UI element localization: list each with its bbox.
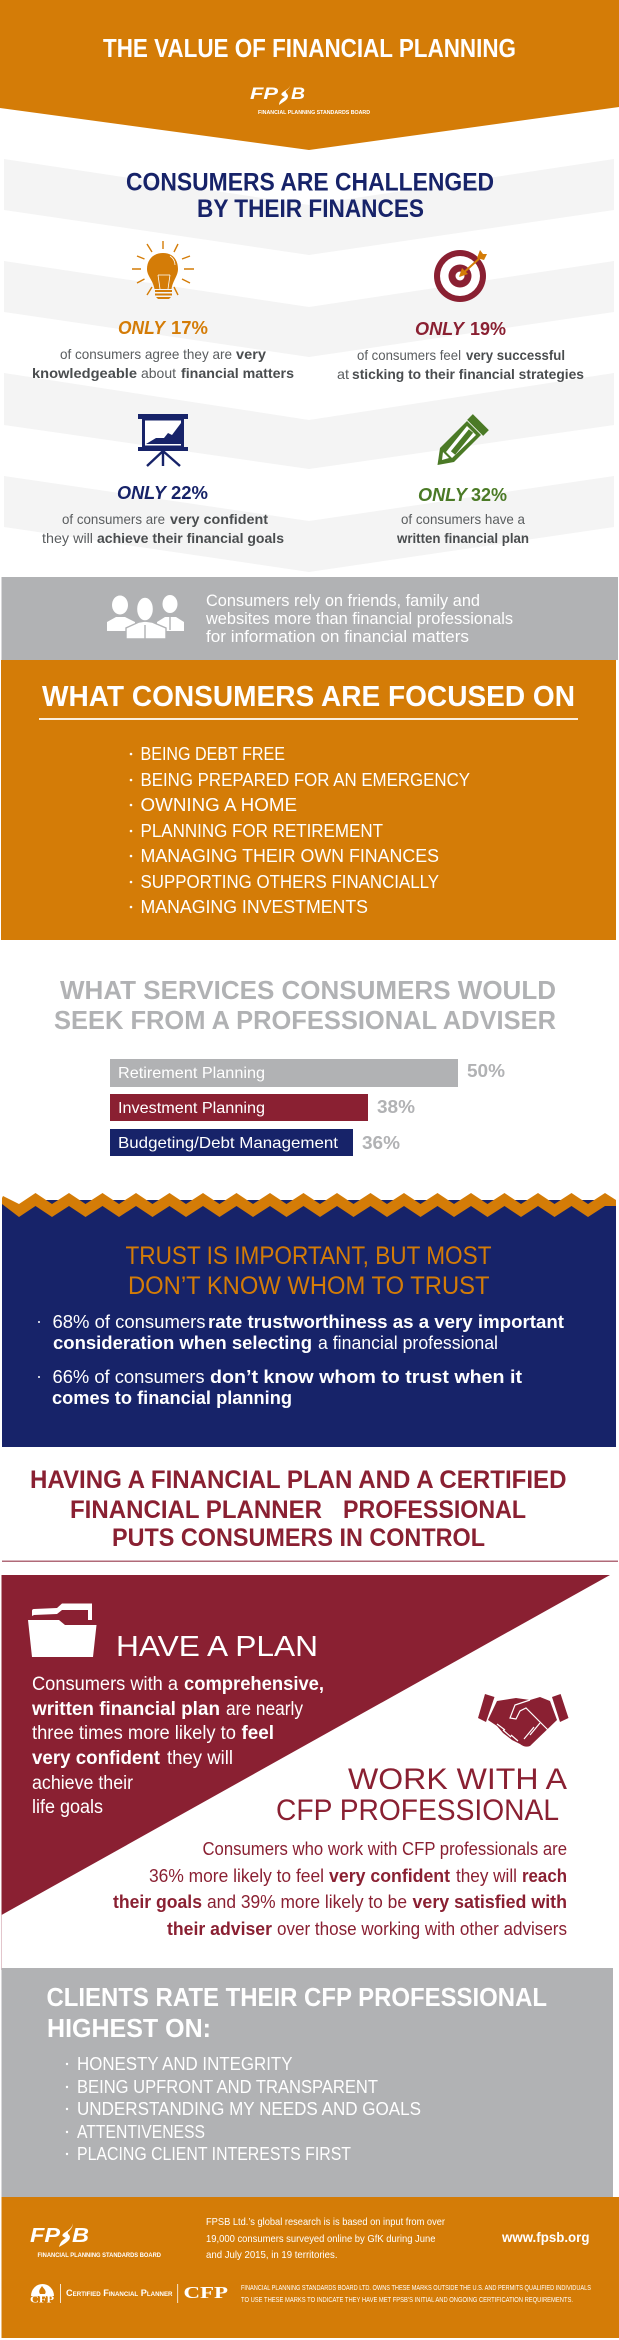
icon: FPSB footer logo	[30, 2222, 161, 2259]
text: 68% bullet: 68% of consumers	[52, 1312, 205, 1332]
stat: only 22%	[42, 483, 284, 546]
list: consumer focus items: BEING DEBT FREE	[140, 744, 285, 764]
stat: only 22%: of consumers are	[62, 511, 165, 527]
panel: footer	[2, 2197, 619, 2338]
stat: only 17%: very	[236, 346, 266, 362]
stat: only 32%	[396, 485, 529, 546]
stat: only 17%	[32, 318, 294, 381]
text: work with a CFP professional body: over those working with other advisers	[277, 1919, 567, 1939]
text: 68% bullet: consideration when selecting	[53, 1333, 312, 1353]
stat: only 17%: 17%	[171, 318, 208, 338]
heading: financial plan and CFP professional: HAVING A FINANCIAL PLAN AND A CERTIFIED	[30, 1466, 566, 1494]
heading: financial plan and CFP professional: FINANCIAL PLANNER	[70, 1496, 322, 1524]
text: work with a CFP professional body: they will	[456, 1866, 517, 1886]
icon: presentation board	[138, 414, 188, 466]
stat: only 17%: ONLY	[118, 318, 167, 338]
list: consumer focus items: SUPPORTING OTHERS FINANCIALLY	[140, 872, 439, 892]
title: THE VALUE OF FINANCIAL PLANNING	[103, 33, 516, 63]
text: 66% bullet: don’t know whom to trust when it	[210, 1367, 522, 1387]
text: have a plan body: life goals	[32, 1797, 103, 1818]
text: work with a CFP professional body: their adviser	[167, 1919, 272, 1939]
stat: only 22%: ONLY	[117, 483, 168, 503]
icon: handshake	[478, 1694, 568, 1747]
icon: FPSB logo: FINANCIAL PLANNING STANDARDS BOARD	[258, 110, 370, 116]
heading: clients rate	[46, 1982, 547, 2043]
stat: only 19%	[337, 319, 584, 382]
bar: investment planning 38%: 38%	[377, 1097, 415, 1117]
callout text	[205, 591, 513, 646]
list: client ratings: HONESTY AND INTEGRITY	[77, 2054, 292, 2074]
text: work with a CFP professional body: reach	[522, 1866, 567, 1886]
text: work with a CFP professional body: Consumers who work with CFP professionals are	[202, 1839, 567, 1859]
text: have a plan body: written financial plan	[31, 1699, 220, 1720]
stat: only 19%: of consumers feel	[357, 347, 461, 363]
list: consumer focus items: BEING PREPARED FOR AN EMERGENCY	[140, 770, 470, 790]
heading: trust: DON’T KNOW WHOM TO TRUST	[128, 1272, 490, 1300]
text: research note: 19,000 consumers surveyed online by GfK during June	[206, 2233, 436, 2245]
panel: what consumers are focused on	[1, 660, 616, 940]
text: website: www.fpsb.org	[501, 2229, 590, 2245]
heading: consumers are challenged: BY THEIR FINANCES	[197, 195, 424, 223]
icon: pencil	[438, 417, 486, 465]
stat: only 22%: achieve their financial goals	[97, 530, 284, 546]
stat: only 32%: written financial plan	[396, 530, 529, 546]
list: client ratings	[66, 2054, 421, 2164]
text: 68% bullet	[38, 1312, 564, 1353]
text: have a plan body: comprehensive,	[184, 1674, 324, 1695]
stat: only 19%: at	[337, 366, 349, 382]
text: work with a CFP professional body: their goals	[113, 1892, 202, 1912]
bar: budgeting 36%: 36%	[362, 1133, 400, 1153]
panel: work with a CFP professional	[113, 1694, 568, 1939]
heading: have a plan: HAVE A PLAN	[116, 1631, 318, 1663]
heading: trust: TRUST IS IMPORTANT, BUT MOST	[126, 1242, 492, 1270]
text: 66% bullet	[38, 1367, 522, 1408]
heading: services from an adviser: SEEK FROM A PROFESSIONAL ADVISER	[54, 1005, 556, 1035]
list: client ratings: ATTENTIVENESS	[77, 2122, 205, 2142]
heading: financial plan and CFP professional: PROFESSIONAL	[343, 1496, 526, 1524]
header banner	[0, 0, 619, 150]
panel: friends and family callout	[2, 577, 618, 660]
text: have a plan body: achieve their	[32, 1773, 134, 1794]
bar: budgeting 36%	[110, 1129, 400, 1156]
icon: CFP marks: CFP	[184, 2283, 228, 2302]
text: research note	[206, 2216, 445, 2261]
icon: CFP marks: CFP	[30, 2294, 55, 2304]
stat: only 32%: 32%	[471, 485, 507, 505]
heading: work with a CFP professional: CFP PROFESSIONAL	[276, 1794, 559, 1827]
list: client ratings: PLACING CLIENT INTERESTS FIRST	[77, 2144, 351, 2164]
list: consumer focus items	[130, 744, 470, 917]
stat: only 32%: ONLY	[418, 485, 469, 505]
icon: FPSB footer logo: FINANCIAL PLANNING STANDARDS BOARD	[38, 2252, 161, 2259]
text: have a plan body: feel	[242, 1723, 274, 1744]
text: 66% bullet: 66% of consumers	[52, 1367, 205, 1387]
heading: financial plan and CFP professional: PUTS CONSUMERS IN CONTROL	[112, 1524, 485, 1552]
stat: only 17%: financial matters	[181, 365, 294, 381]
heading: services from an adviser	[54, 975, 556, 1035]
text: have a plan body: Consumers with a	[32, 1674, 178, 1695]
heading: consumers are challenged: CONSUMERS ARE CHALLENGED	[126, 168, 494, 196]
icon: FPSB footer logo: B	[72, 2225, 89, 2247]
icon: FPSB logo	[250, 82, 370, 116]
heading: services from an adviser: WHAT SERVICES CONSUMERS WOULD	[60, 975, 556, 1005]
heading: financial plan and CFP professional	[30, 1466, 566, 1552]
text: have a plan body	[31, 1674, 324, 1818]
stat: only 17%: about	[141, 365, 176, 381]
text: 68% bullet: a financial professional	[318, 1333, 498, 1353]
heading: clients rate: CLIENTS RATE THEIR CFP PROFESSIONAL	[46, 1982, 547, 2012]
heading: consumers are challenged	[126, 168, 494, 223]
text: have a plan body: are nearly	[226, 1699, 303, 1720]
icon: FPSB logo: FP	[250, 84, 279, 103]
heading: trust	[126, 1242, 492, 1300]
text: 68% bullet: rate trustworthiness as a very important	[208, 1312, 564, 1332]
stat: only 17%: of consumers agree they are	[60, 346, 232, 362]
text: work with a CFP professional body	[113, 1839, 567, 1939]
icon: FPSB logo: B	[291, 84, 305, 103]
bar: retirement planning 50%	[110, 1059, 505, 1087]
bar: retirement planning 50%: Retirement Planning	[118, 1065, 265, 1082]
icon: folder	[28, 1604, 96, 1657]
list: client ratings: UNDERSTANDING MY NEEDS AND GOALS	[77, 2099, 421, 2119]
bar: investment planning 38%	[110, 1094, 415, 1121]
bar: retirement planning 50%: 50%	[467, 1061, 505, 1081]
list: consumer focus items: MANAGING THEIR OWN FINANCES	[140, 846, 439, 866]
text: research note: and July 2015, in 19 territories.	[206, 2249, 338, 2261]
icon: target with arrow	[434, 250, 487, 302]
bar chart: adviser services	[110, 1059, 505, 1156]
text: have a plan body: they will	[167, 1748, 233, 1769]
text: legal note	[241, 2285, 591, 2304]
stat: only 22%: they will	[42, 530, 93, 546]
panel: have a plan	[2, 1575, 610, 1915]
stat: only 19%: sticking to their financial strategies	[352, 366, 584, 382]
text: work with a CFP professional body: and 39% more likely to be	[207, 1892, 407, 1912]
text: have a plan body: three times more likely to	[32, 1723, 236, 1744]
list: consumer focus items: MANAGING INVESTMENTS	[140, 897, 368, 917]
text: research note: FPSB Ltd.’s global research is is based on input from over	[206, 2216, 445, 2228]
stat: only 22%: 22%	[171, 483, 208, 503]
icon: CFP marks	[30, 2283, 228, 2304]
icon: CFP marks: Certified Financial Planner	[66, 2288, 173, 2298]
heading: work with a CFP professional	[276, 1763, 567, 1827]
callout text: Consumers rely on friends, family and	[206, 591, 480, 610]
icon: light bulb	[132, 241, 194, 299]
panel: clients rate their CFP professional	[2, 1968, 613, 2197]
text: work with a CFP professional body: very satisfied with	[412, 1892, 567, 1912]
text: have a plan body: very confident	[32, 1748, 161, 1769]
text: work with a CFP professional body: very confident	[329, 1866, 450, 1886]
callout text: websites more than financial professionals	[205, 609, 513, 628]
stat: only 19%: 19%	[470, 319, 506, 339]
list: consumer focus items: OWNING A HOME	[140, 795, 297, 815]
stat: only 22%: very confident	[170, 511, 268, 527]
stat: only 17%: knowledgeable	[32, 365, 137, 381]
list: client ratings: BEING UPFRONT AND TRANSPARENT	[77, 2077, 378, 2097]
heading: focused on: WHAT CONSUMERS ARE FOCUSED ON	[42, 681, 575, 713]
text: 66% bullet: comes to financial planning	[52, 1388, 292, 1408]
bar: investment planning 38%: Investment Planning	[118, 1100, 265, 1117]
stat: only 19%: ONLY	[415, 319, 466, 339]
heading: work with a CFP professional: WORK WITH A	[348, 1763, 567, 1796]
text: work with a CFP professional body: 36% more likely to feel	[149, 1866, 324, 1886]
stat: only 19%: very successful	[466, 347, 565, 363]
bar: budgeting 36%: Budgeting/Debt Management	[118, 1135, 339, 1152]
heading: clients rate: HIGHEST ON:	[47, 2013, 211, 2043]
callout text: for information on financial matters	[206, 627, 469, 646]
icon: FPSB footer logo: FP	[30, 2225, 61, 2247]
list: consumer focus items: PLANNING FOR RETIREMENT	[140, 821, 383, 841]
icon: people	[107, 595, 184, 639]
background chevrons	[4, 159, 614, 572]
stat: only 32%: of consumers have a	[401, 511, 525, 527]
panel: trust	[2, 1193, 616, 1447]
